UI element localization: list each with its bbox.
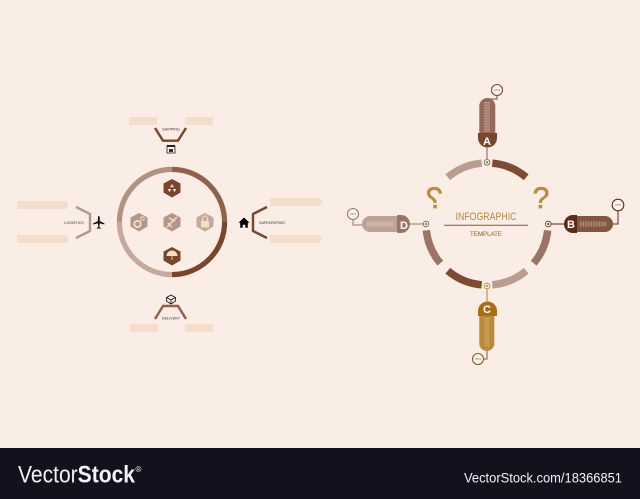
divider: title rule — [444, 224, 528, 226]
text block: logistics upper — [17, 202, 68, 208]
text block: safekeeping upper — [270, 199, 322, 205]
callout: D: D — [400, 220, 408, 232]
icon: question mark right: ? — [533, 182, 549, 215]
callout: A: A — [483, 136, 491, 148]
label: delivery: DELIVERY — [162, 316, 181, 320]
label: logistics: LOGISTICS — [64, 221, 84, 225]
image id text: VectorStock.com/18366851 — [464, 470, 622, 485]
bracket: safekeeping — [253, 207, 267, 238]
ring: four quadrant arcs — [119, 169, 225, 275]
icon: box — [166, 295, 176, 304]
ring: six arc segments — [426, 163, 548, 285]
icon: hexagon plane — [164, 213, 180, 232]
text block: delivery left — [130, 325, 158, 331]
bracket: logistics — [76, 207, 90, 238]
footer bar — [0, 448, 640, 499]
text block: safekeeping lower — [270, 236, 322, 242]
label: shipping: SHIPPING — [162, 127, 180, 131]
icon: calendar — [167, 145, 175, 153]
label: safekeeping: SAFEKEEPING — [259, 221, 285, 225]
text block: delivery right — [185, 325, 213, 331]
callout: C: C — [483, 304, 491, 316]
callout: A — [478, 84, 502, 165]
text block: shipping right — [185, 118, 213, 124]
bracket: delivery — [155, 306, 186, 319]
icon: hexagon umbrella — [164, 247, 180, 266]
panel: delivery — [130, 295, 213, 331]
icon: hexagon padlock — [196, 213, 214, 232]
callout: C — [472, 283, 497, 364]
panel: logistics — [17, 202, 105, 242]
brand logo text: VectorStock — [18, 462, 136, 488]
panel: shipping — [129, 118, 213, 153]
bracket: shipping — [155, 128, 186, 141]
icon: question mark left: ? — [426, 182, 443, 215]
callout: D — [348, 208, 429, 233]
icon: house — [238, 218, 250, 228]
icon: plane — [93, 216, 105, 229]
callout: A: 37% — [494, 88, 500, 92]
registered mark: ® — [136, 465, 142, 474]
panel: safekeeping — [238, 199, 322, 242]
text block: logistics lower — [17, 236, 68, 242]
callout: C: 75% — [475, 357, 481, 361]
icon: hexagon radiation — [164, 179, 180, 198]
panel: right circular diagram — [348, 84, 624, 364]
callout: B — [546, 199, 624, 233]
panel: left circular diagram — [119, 169, 225, 275]
icon: hexagon gears — [130, 213, 148, 232]
callout: B: 37% — [615, 203, 621, 207]
heading: infographic: INFOGRAPHIC — [456, 211, 517, 223]
heading: template: TEMPLATE — [470, 231, 502, 238]
callout: D: 24% — [350, 212, 356, 216]
callout: B: B — [567, 219, 575, 231]
text block: shipping left — [129, 118, 157, 124]
